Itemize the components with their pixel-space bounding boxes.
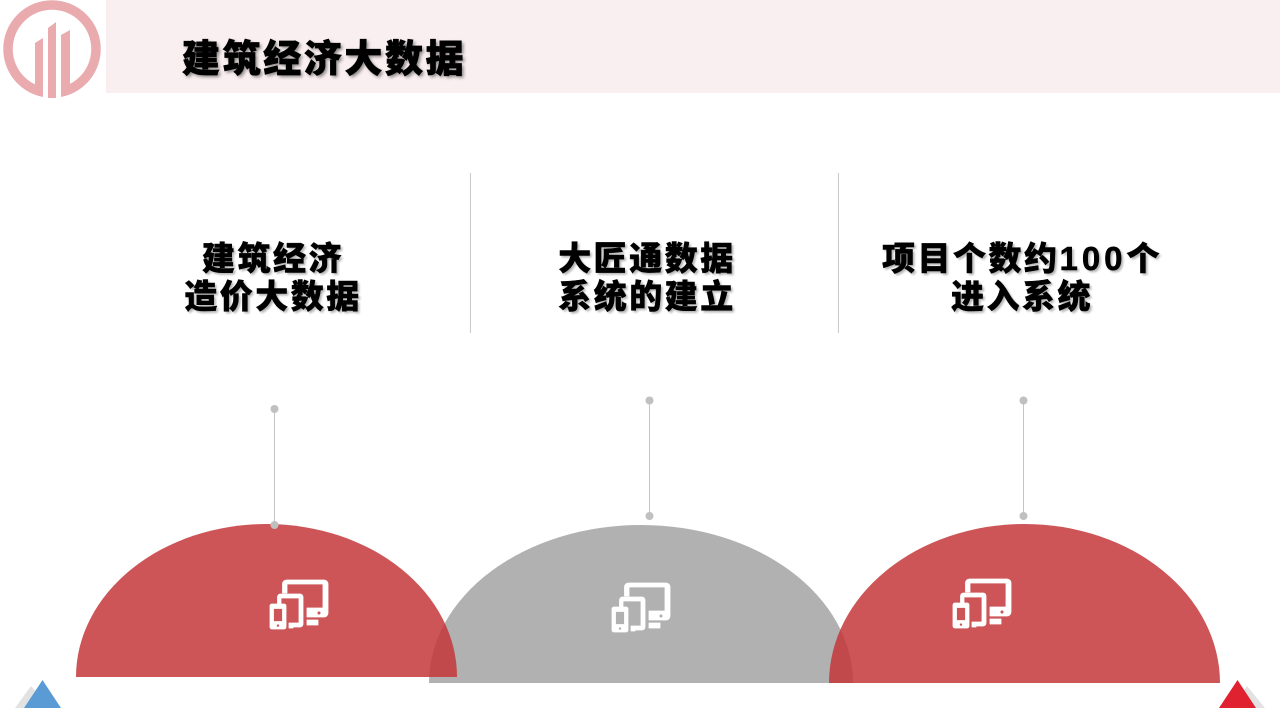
heading: column 1: 建筑经济 xyxy=(202,240,344,277)
triangle: bottom left xyxy=(15,680,61,708)
connector: left xyxy=(270,405,278,529)
heading: column 3: 进入系统 xyxy=(951,278,1093,315)
icon: devices right xyxy=(953,579,1011,628)
icon: devices centre xyxy=(612,583,670,632)
divider xyxy=(470,173,472,333)
semicircle: centre grey xyxy=(429,525,853,683)
heading: column 3 xyxy=(882,240,1162,315)
heading: column 1 xyxy=(184,240,362,315)
title: 建筑经济大数据 xyxy=(182,39,466,81)
semicircle: left red xyxy=(76,524,457,677)
triangle: bottom right xyxy=(1219,680,1265,708)
heading: column 1: 造价大数据 xyxy=(184,278,362,315)
icon: devices left xyxy=(270,580,328,629)
connector: right xyxy=(1020,396,1028,520)
divider xyxy=(838,173,840,333)
heading: column 2: 大匠通数据 xyxy=(558,240,736,277)
header band xyxy=(106,0,1280,93)
heading: column 2: 系统的建立 xyxy=(558,278,736,315)
heading: column 3: 项目个数约100个 xyxy=(882,240,1162,277)
heading: column 2 xyxy=(558,240,736,315)
connector: centre xyxy=(646,396,654,520)
semicircle: right red xyxy=(829,524,1220,683)
logo xyxy=(8,5,96,100)
